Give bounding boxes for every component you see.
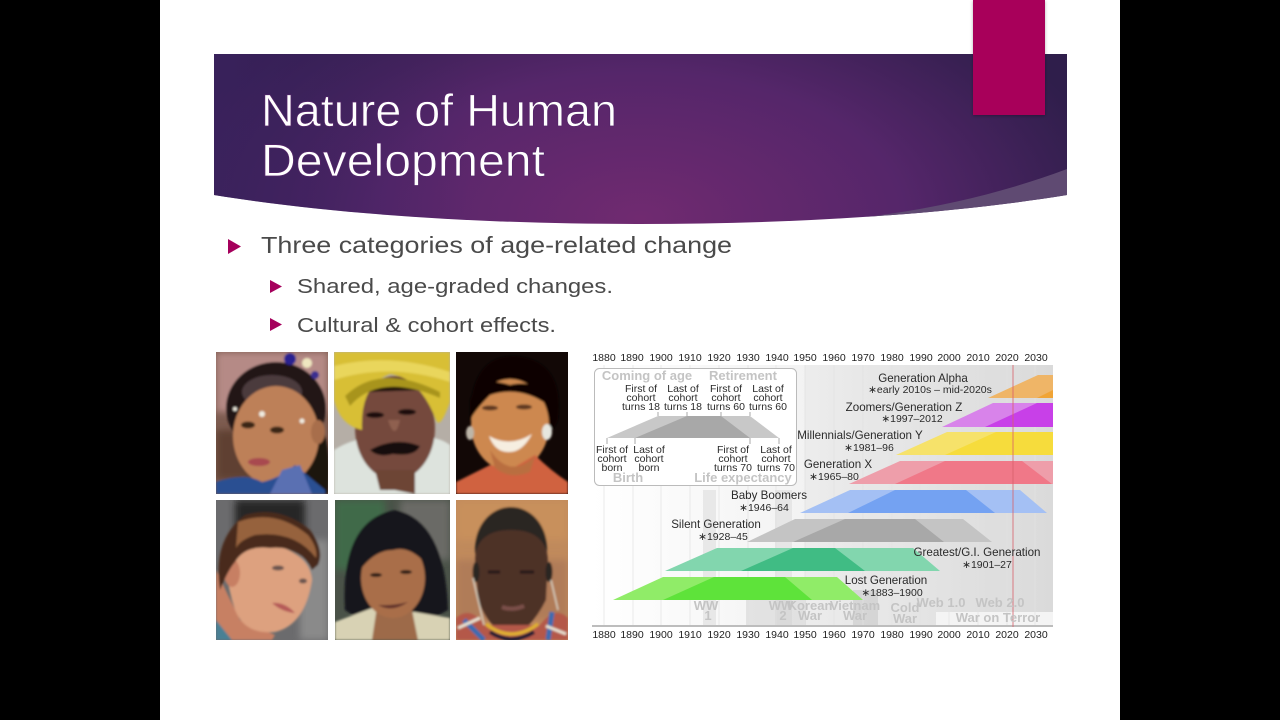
historical event labels: Web 2.0 <box>976 595 1024 610</box>
header banner <box>214 54 1067 230</box>
photo: girl <box>216 352 329 494</box>
cohort legend box: turns 70 <box>714 462 752 474</box>
band: generation y <box>896 432 1053 455</box>
band: silent generation <box>747 519 992 542</box>
axis years top: 1940 <box>765 352 789 364</box>
axis years top: 1920 <box>707 352 731 364</box>
cohort legend box: cohort <box>626 392 656 404</box>
axis years top: 1990 <box>909 352 933 364</box>
axis years bottom: 1960 <box>822 629 846 641</box>
historical event labels: War <box>798 608 822 623</box>
generation labels: Generation X <box>804 458 872 471</box>
band: generation x <box>849 461 1053 484</box>
cohort legend box: turns 70 <box>757 462 795 474</box>
title: Nature of Human <box>261 85 617 136</box>
bullet: three categories: Three categories of age-related change <box>261 232 732 258</box>
axis years bottom: 1970 <box>851 629 875 641</box>
generation labels: Baby Boomers <box>731 489 807 502</box>
cohort legend box: cohort <box>718 453 748 465</box>
cohort legend box: Last of <box>760 444 792 456</box>
axis years bottom: 1890 <box>620 629 644 641</box>
cohort legend box: Life expectancy <box>694 470 793 485</box>
cohort legend box: cohort <box>753 392 783 404</box>
cohort legend box: Retirement <box>709 368 778 383</box>
generation labels: ∗1883–1900 <box>861 587 923 599</box>
cohort legend box: cohort <box>668 392 698 404</box>
axis years top: 2000 <box>937 352 961 364</box>
current year marker <box>1012 365 1014 627</box>
generation labels: ∗1901–27 <box>962 559 1012 571</box>
photo: man in yellow turban <box>334 352 450 494</box>
generation labels: Greatest/G.I. Generation <box>914 546 1040 559</box>
axis years bottom: 1980 <box>880 629 904 641</box>
historical event labels: WW <box>769 598 794 613</box>
band: baby boomers <box>800 490 1047 513</box>
generation labels: ∗1946–64 <box>739 502 789 514</box>
axis years bottom: 1920 <box>707 629 731 641</box>
axis years top: 1930 <box>736 352 760 364</box>
axis years top: 1890 <box>620 352 644 364</box>
accent tab <box>973 0 1045 115</box>
axis years bottom <box>592 629 1048 641</box>
axis years top: 2010 <box>966 352 990 364</box>
chart background <box>592 365 1053 627</box>
cohort legend box: First of <box>625 383 657 395</box>
cohort legend box: cohort <box>634 453 664 465</box>
historical event labels: War <box>893 611 917 626</box>
axis years bottom: 1990 <box>909 629 933 641</box>
title <box>261 85 617 186</box>
axis years bottom: 1940 <box>765 629 789 641</box>
generation labels: ∗1997–2012 <box>881 413 943 425</box>
axis years bottom: 2030 <box>1024 629 1048 641</box>
axis years bottom: 2020 <box>995 629 1019 641</box>
historical event labels: 1 <box>704 608 712 623</box>
photo: young man <box>216 500 328 640</box>
generation labels: ∗1928–45 <box>698 531 748 543</box>
band: generation z <box>942 403 1053 427</box>
axis years bottom: 1950 <box>793 629 817 641</box>
axis years top <box>592 352 1048 364</box>
cohort legend box: Last of <box>752 383 784 395</box>
historical event labels <box>694 595 1040 626</box>
cohort legend box: First of <box>710 383 742 395</box>
cohort legend box <box>594 368 796 486</box>
cohort legend box: turns 18 <box>622 401 660 413</box>
historical event labels: 2 <box>779 608 787 623</box>
generation labels: Silent Generation <box>671 518 761 531</box>
title: Development <box>261 135 546 186</box>
photo: older woman with beads <box>456 500 568 640</box>
slide <box>160 0 1120 720</box>
photo: smiling woman <box>456 352 568 494</box>
axis years top: 1880 <box>592 352 616 364</box>
generation labels: Millennials/Generation Y <box>797 429 923 442</box>
cohort legend box: Coming of age <box>602 368 692 383</box>
axis years top: 2030 <box>1024 352 1048 364</box>
axis years top: 1910 <box>678 352 702 364</box>
generation labels: Lost Generation <box>845 574 927 587</box>
axis years top: 1960 <box>822 352 846 364</box>
axis years bottom: 1930 <box>736 629 760 641</box>
axis years bottom: 1900 <box>649 629 673 641</box>
axis years top: 1980 <box>880 352 904 364</box>
cohort legend box: First of <box>717 444 749 456</box>
axis years bottom: 1910 <box>678 629 702 641</box>
bullet: shared changes: Shared, age-graded changes. <box>297 275 613 298</box>
cohort legend box: Birth <box>613 470 643 485</box>
band: generation alpha <box>988 375 1053 398</box>
bullet: cultural effects: Cultural & cohort effects. <box>297 314 556 337</box>
axis years top: 1970 <box>851 352 875 364</box>
axis years top: 1900 <box>649 352 673 364</box>
generation labels: ∗1965–80 <box>809 471 859 483</box>
photo: young woman <box>335 500 450 640</box>
cohort legend box: turns 18 <box>664 401 702 413</box>
historical event labels: Web 1.0 <box>917 595 965 610</box>
historical event labels: War <box>843 608 867 623</box>
historical event labels: Cold <box>891 600 919 615</box>
generations timeline chart <box>592 352 1053 641</box>
historical event labels: War on Terror <box>956 610 1040 625</box>
cohort legend box: born <box>601 462 623 474</box>
band: lost generation <box>613 577 863 600</box>
axis years bottom: 1880 <box>592 629 616 641</box>
bullet list <box>228 232 732 337</box>
historical event labels: WW <box>694 598 719 613</box>
band: greatest generation <box>665 548 940 571</box>
cohort legend box: born <box>638 462 660 474</box>
axis years top: 2020 <box>995 352 1019 364</box>
historical event labels: Vietnam <box>830 598 880 613</box>
cohort legend box: cohort <box>761 453 791 465</box>
generation labels <box>671 372 1040 599</box>
generation labels: ∗early 2010s – mid-2020s <box>868 384 992 396</box>
cohort legend box: cohort <box>597 453 627 465</box>
generation labels: Zoomers/Generation Z <box>846 401 962 414</box>
cohort legend box: cohort <box>711 392 741 404</box>
cohort legend box: turns 60 <box>749 401 787 413</box>
generation labels: Generation Alpha <box>878 372 968 385</box>
historical event labels: Korean <box>788 598 832 613</box>
cohort legend box: Last of <box>633 444 665 456</box>
cohort legend box: Last of <box>667 383 699 395</box>
generation labels: ∗1981–96 <box>844 442 894 454</box>
axis years top: 1950 <box>793 352 817 364</box>
cohort legend box: turns 60 <box>707 401 745 413</box>
cohort legend box: First of <box>596 444 628 456</box>
axis years bottom: 2010 <box>966 629 990 641</box>
axis years bottom: 2000 <box>937 629 961 641</box>
